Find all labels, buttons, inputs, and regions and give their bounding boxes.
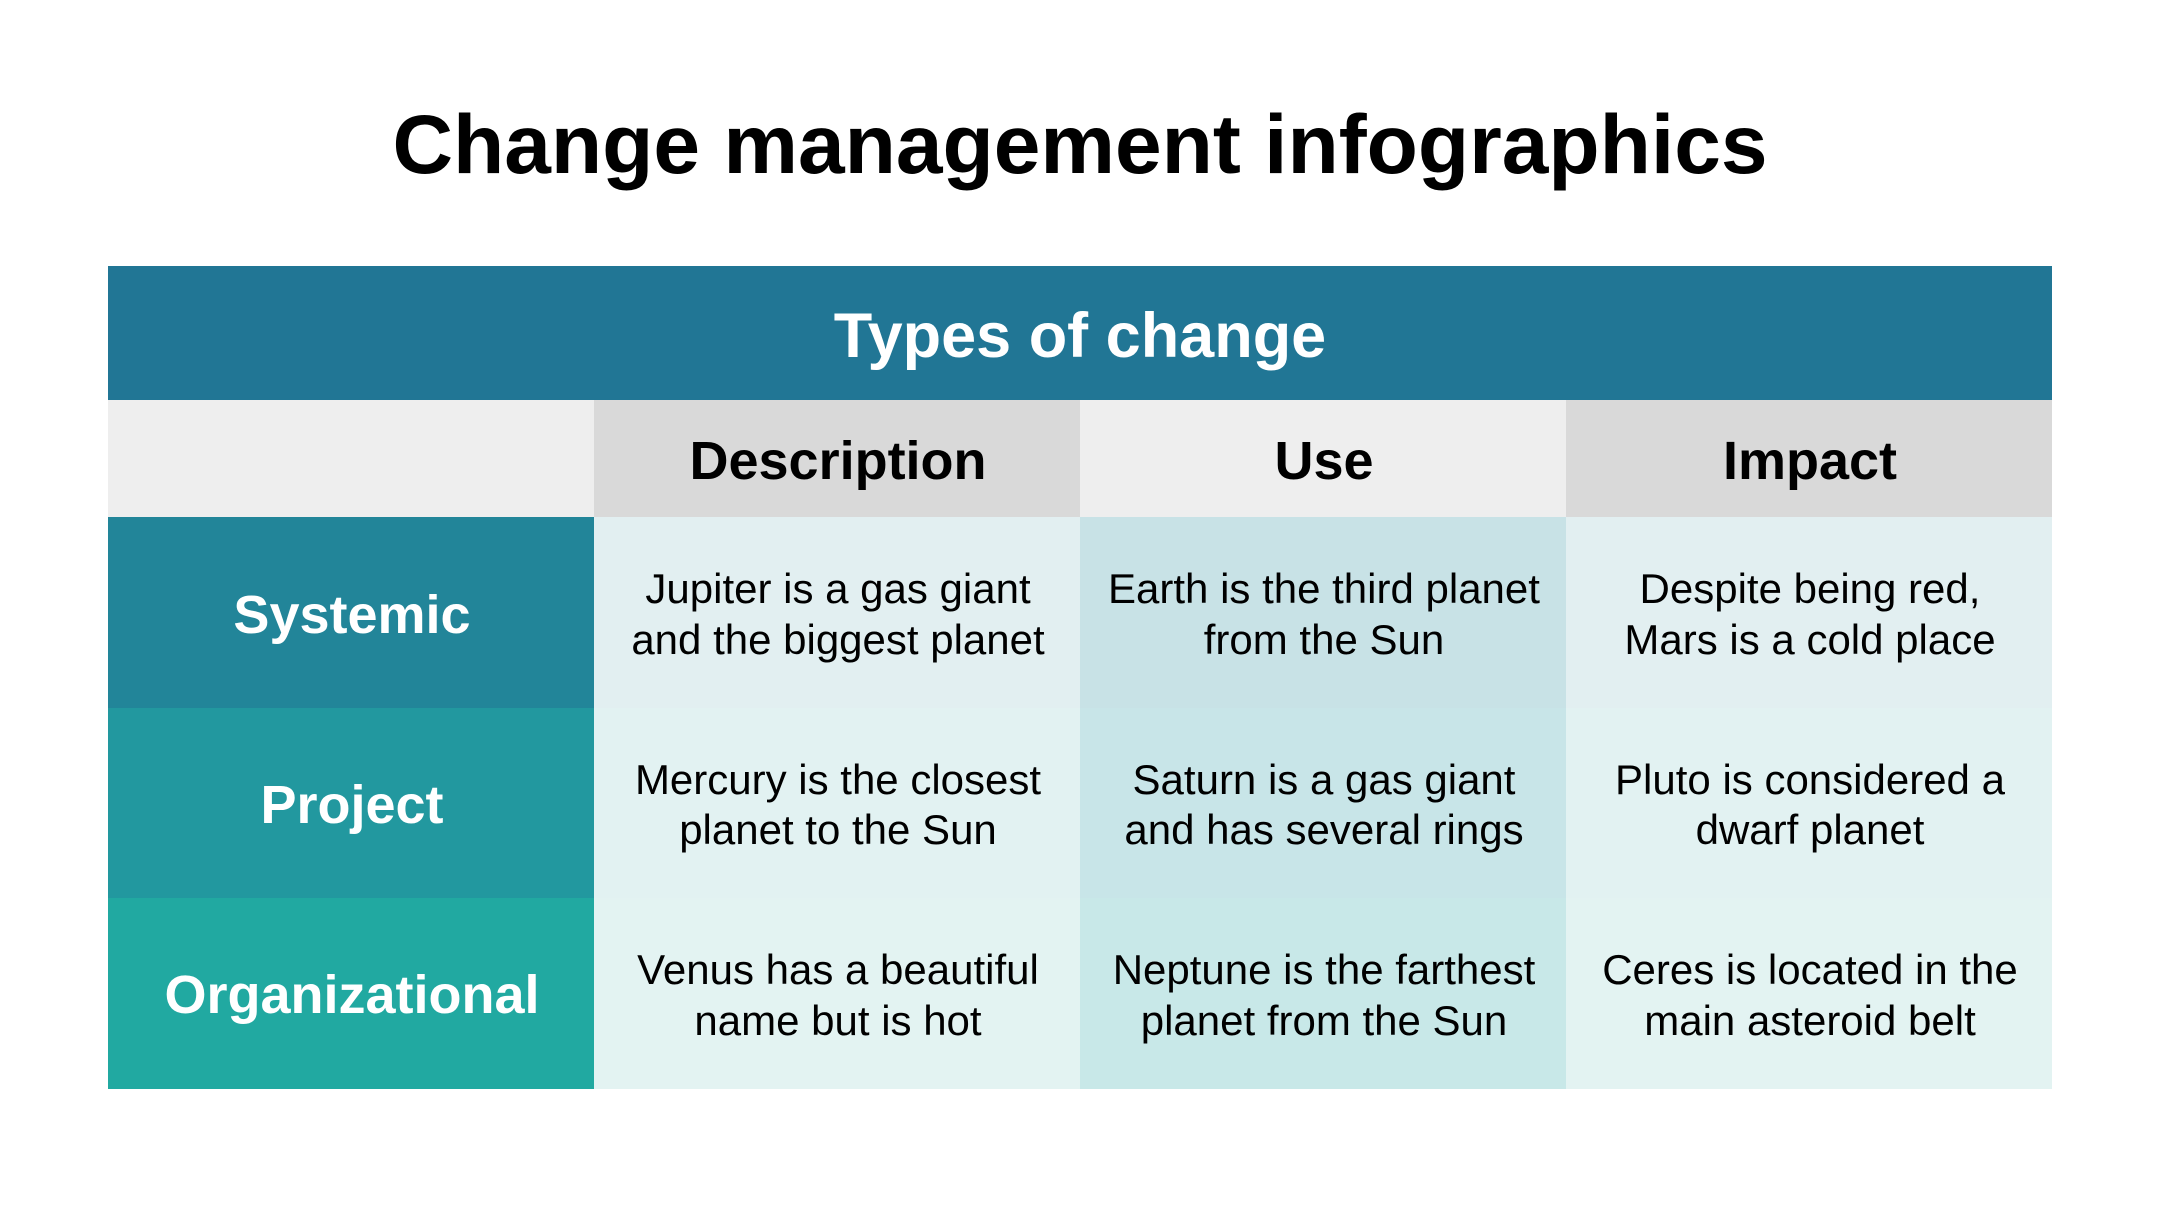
cell: Organizational description: name but is hot	[694, 996, 982, 1044]
cell: Organizational use: planet from the Sun	[1141, 996, 1507, 1044]
cell: Project use: Saturn is a gas giant	[1133, 756, 1515, 802]
row header: Organizational: Organizational	[164, 965, 540, 1025]
cell: Project description	[594, 708, 1080, 898]
cell: Organizational use	[1080, 898, 1566, 1089]
column header: Impact: Impact	[1723, 430, 1897, 490]
title: Change management infographics	[392, 97, 1768, 191]
cell: Organizational impact: Ceres is located in the	[1602, 946, 2018, 993]
cell: Project description: Mercury is the closest	[635, 756, 1041, 802]
cell: Project description: planet to the Sun	[679, 806, 997, 853]
column header: Impact	[1566, 400, 2052, 517]
row header: Systemic	[108, 517, 594, 708]
row header: Organizational	[108, 898, 594, 1089]
cell: Organizational impact	[1566, 898, 2052, 1089]
table heading: Types of change	[108, 266, 2052, 400]
cell: Systemic use: from the Sun	[1204, 616, 1444, 662]
cell: Systemic use	[1080, 517, 1566, 708]
cell: Project use: and has several rings	[1124, 806, 1524, 853]
cell: Organizational description	[594, 898, 1080, 1089]
cell: Systemic impact: Despite being red,	[1640, 564, 1980, 612]
cell: Systemic impact: Mars is a cold place	[1624, 616, 1996, 662]
row header: Systemic: Systemic	[233, 585, 471, 645]
cell: Organizational use: Neptune is the farthest	[1113, 946, 1535, 993]
cell: Systemic use: Earth is the third planet	[1108, 564, 1540, 612]
cell: Project impact: dwarf planet	[1696, 806, 1924, 853]
column header: Description	[594, 400, 1080, 517]
cell: Systemic description	[594, 517, 1080, 708]
table heading: Types of change: Types of change	[834, 301, 1326, 371]
cell: Systemic description: Jupiter is a gas giant	[645, 564, 1031, 612]
cell: Systemic impact	[1566, 517, 2052, 708]
cell: Organizational impact: main asteroid belt	[1644, 996, 1976, 1044]
column header: Use	[1080, 400, 1566, 517]
cell: Project impact	[1566, 708, 2052, 898]
column header: Description: Description	[689, 430, 987, 490]
cell: Project impact: Pluto is considered a	[1615, 756, 2005, 802]
row header: Project	[108, 708, 594, 898]
row header: Project: Project	[260, 775, 444, 835]
column header: Use: Use	[1274, 430, 1374, 490]
cell: Organizational description: Venus has a beautiful	[637, 946, 1039, 993]
cell: Project use	[1080, 708, 1566, 898]
cell: Systemic description: and the biggest planet	[631, 616, 1045, 662]
empty corner cell	[108, 400, 594, 517]
